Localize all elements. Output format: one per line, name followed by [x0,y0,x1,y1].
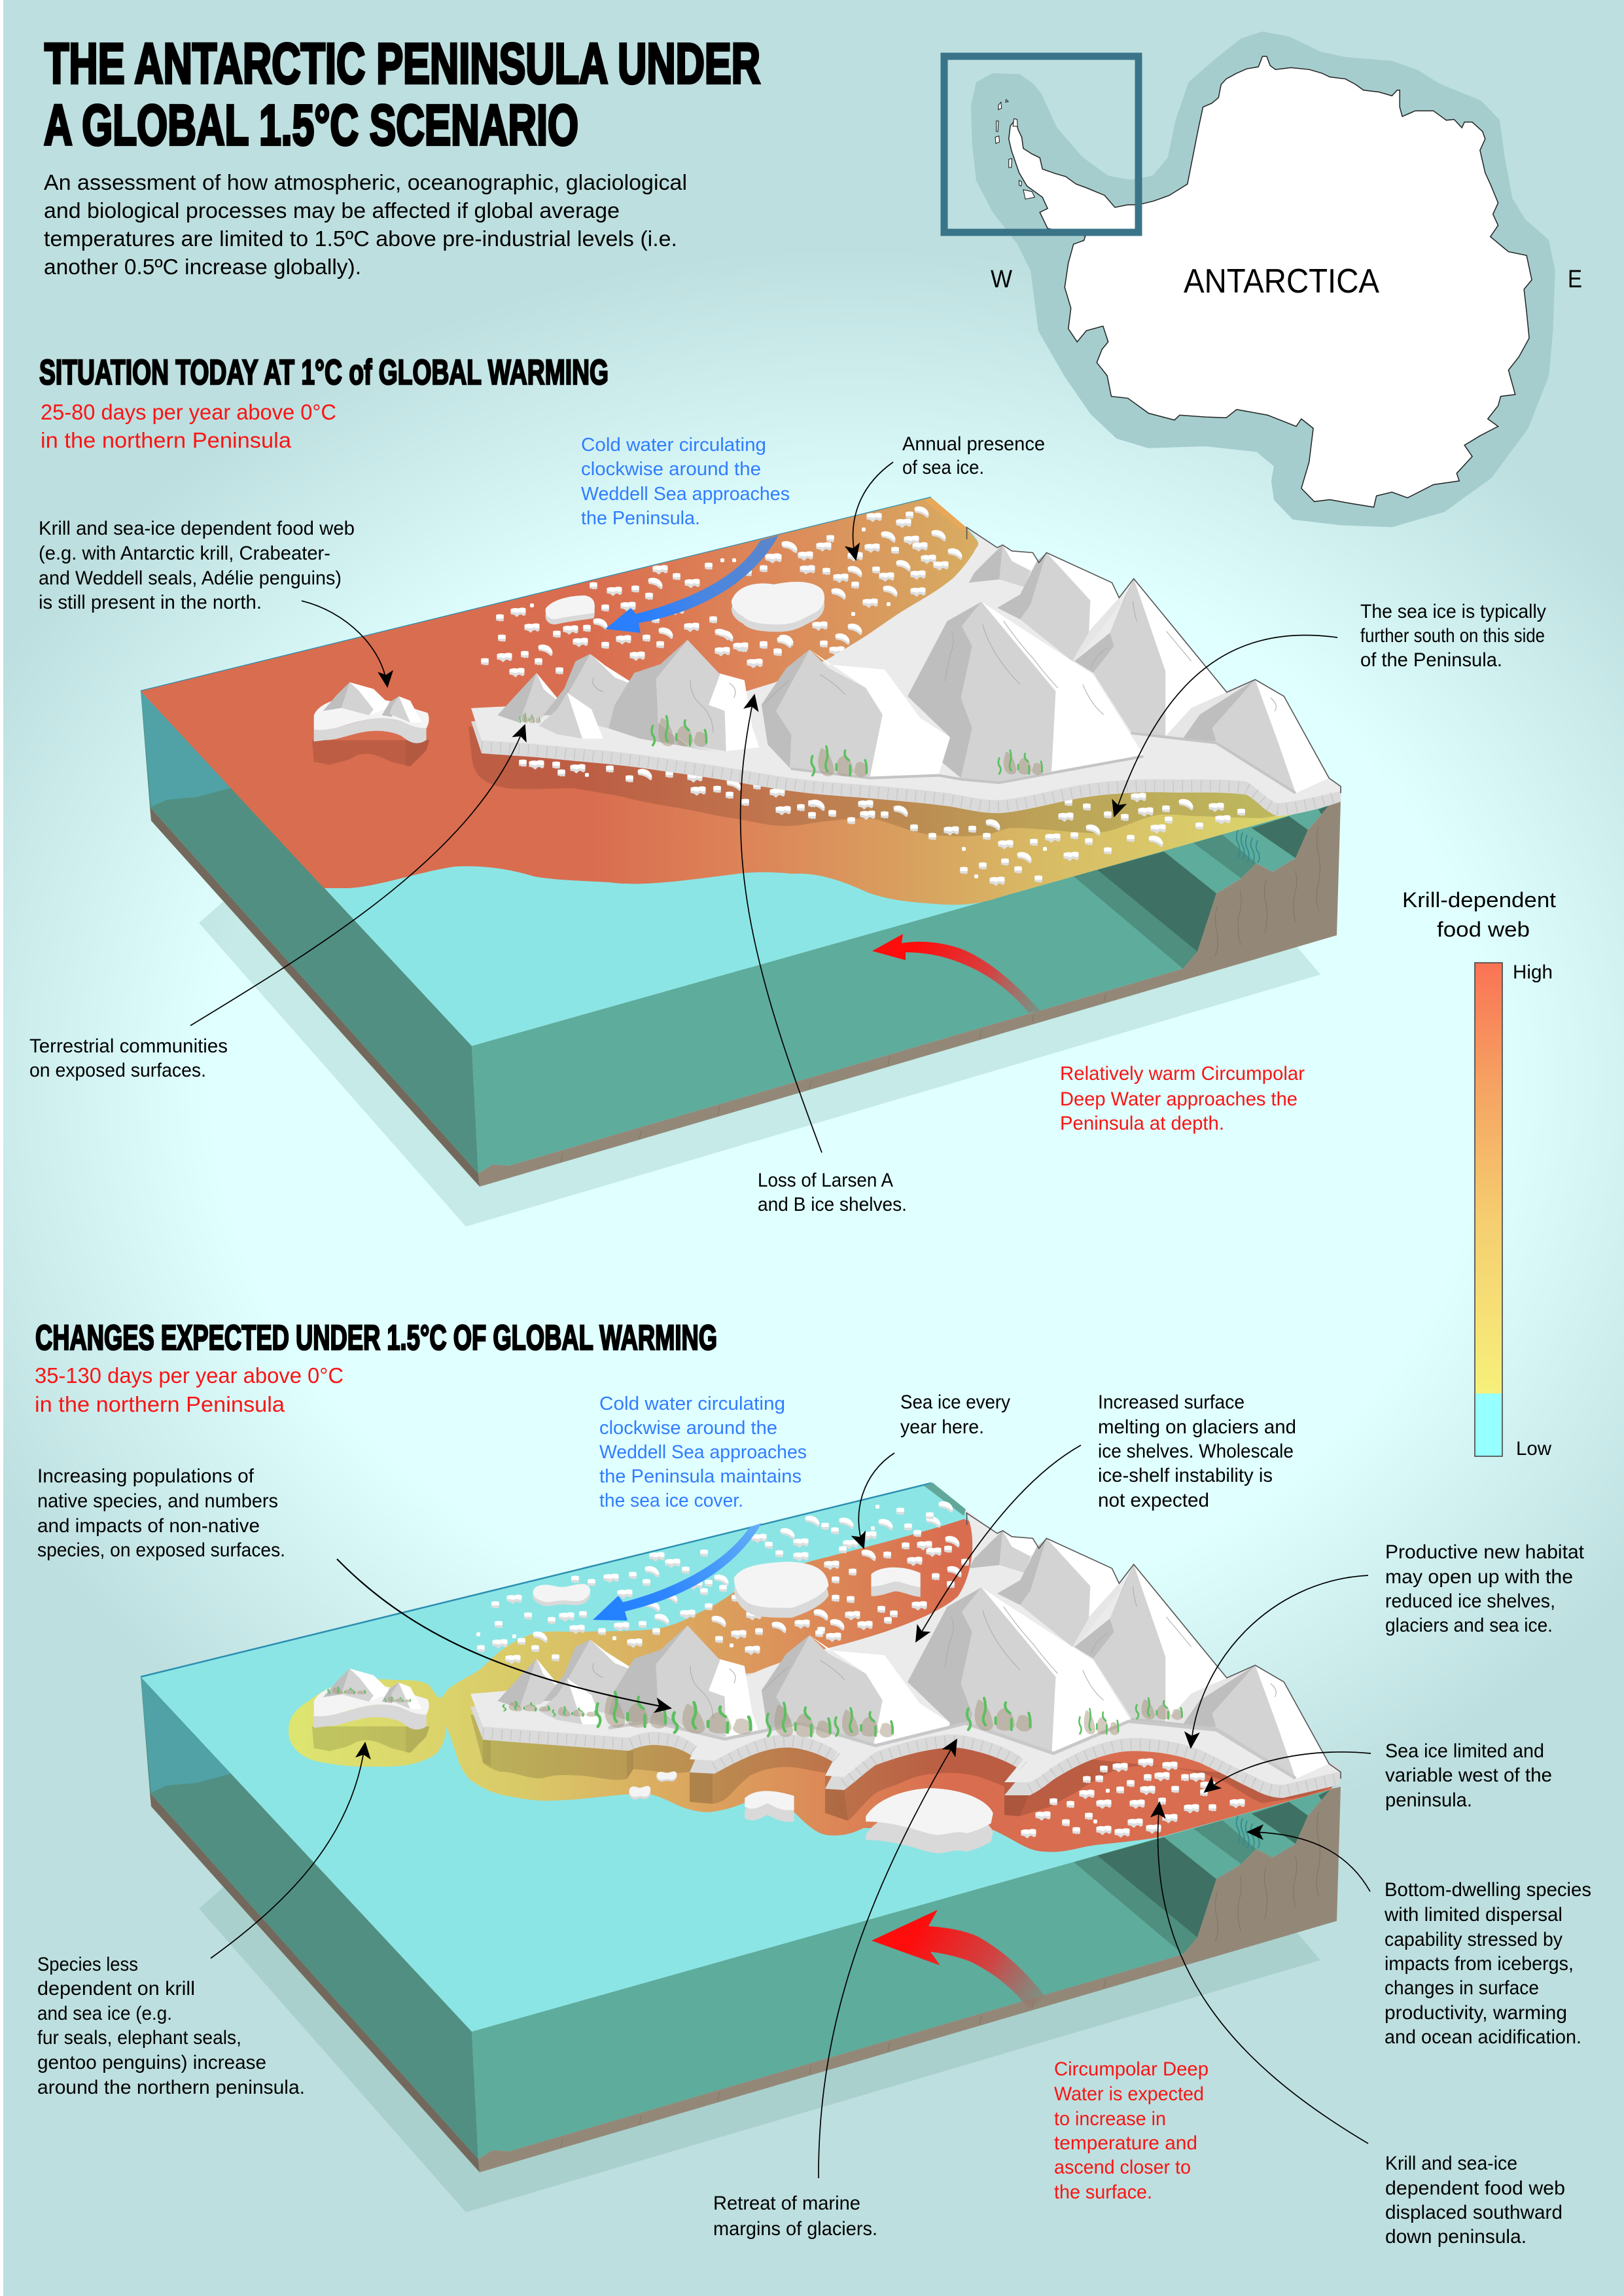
arrow: productive new habitat [1191,1575,1368,1748]
island with mountains [312,682,429,766]
page edge strip [0,0,3,2296]
text: increased surface melting [1098,1391,1296,1511]
text: deep water expected: ascend closer to [1054,2157,1191,2178]
ice shelf and glacier surface [471,528,1341,803]
ocean block with seabed and rock face [141,1677,1341,2212]
text: sea ice east: of the Peninsula. [1360,649,1502,671]
ice face crevasses [482,747,1341,810]
arrow: sea ice limited [1205,1752,1371,1792]
ice shelf and glacier surface [470,1509,1339,1785]
text: days above zero today [41,400,336,452]
text: increasing populations: native species, and numbers [37,1490,278,1512]
map label: east: E [1568,266,1582,293]
text: species less dependent: and sea ice (e.g. [37,2003,172,2024]
title: A GLOBAL 1.5°C SCENARIO [44,94,578,157]
text: Larsen ice shelves [758,1170,907,1215]
back edge line [141,1483,931,1677]
title [44,32,760,157]
text: retreat of glaciers: Retreat of marine [713,2193,860,2214]
map label: west: W [991,266,1012,293]
text: krill food web today: is still present in the north. [39,592,262,613]
text: cold water today: clockwise around the [581,459,761,480]
mountains [497,527,1341,793]
text: terrestrial communities [29,1035,228,1081]
arrow: increased surface melting [916,1445,1081,1641]
text: bottom-dwelling species: productivity, warming [1385,2002,1567,2024]
text: days above zero today: in the northern Peninsula [41,428,292,452]
text: species less dependent: dependent on krill [37,1978,195,2000]
arrow: Larsen ice shelves [741,695,822,1153]
panel: diagram under 1.5C [141,1482,1341,2212]
text: sea ice limited [1385,1740,1552,1811]
legend title [1402,888,1556,941]
ice shelf front face [471,707,1341,816]
text: Larsen ice shelves: and B ice shelves. [758,1194,907,1215]
text: terrestrial communities: on exposed surfaces. [29,1060,206,1081]
text: cold water today: the Peninsula. [581,508,700,529]
arrow: terrestrial communities [190,725,525,1026]
text: productive new habitat: reduced ice shelves, [1385,1590,1555,1612]
panel: locator map of Antarctica [944,33,1582,526]
arrow: circumpolar deep water rising [872,1910,1045,2009]
ice shelf front face [470,1669,1339,1798]
text: sea ice east: further south on this side [1360,625,1545,647]
ice face crevasses [483,1733,1339,1791]
text: terrestrial communities: Terrestrial communities [29,1035,228,1057]
text: deep water expected: Circumpolar Deep [1054,2058,1209,2080]
text: bottom-dwelling species: and ocean acidification. [1385,2026,1581,2048]
arrow: cold Weddell Sea water [605,535,779,633]
map label: Antarctica: ANTARCTICA [1184,262,1379,300]
text: krill food web today [39,518,355,613]
sea ice floes [481,507,1245,886]
arrow: sea ice east [1114,635,1337,816]
text: sea ice east [1360,601,1546,671]
text: bottom-dwelling species: impacts from icebergs, [1385,1953,1574,1975]
text: increased surface melting: Increased surface [1098,1391,1244,1413]
title: THE ANTARCTIC PENINSULA UNDER [44,32,760,96]
text: sea ice limited: peninsula. [1385,1789,1472,1811]
map: sea ice halo and continent [972,33,1553,526]
text: annual sea ice [902,433,1045,478]
legend label high: High [1513,961,1553,983]
text: increasing populations: species, on exposed surfaces. [37,1539,285,1561]
intro text block: another 0.5ºC increase globally). [44,255,361,279]
arrow: increasing populations [337,1559,671,1708]
krill food web gradient on sea surface [141,497,1331,905]
shadow below ice shelf [468,726,1335,836]
text: sea ice limited: Sea ice limited and [1385,1740,1544,1762]
mountain base line [609,1721,1296,1778]
sea surface [141,1483,1331,2032]
intro text block [44,170,687,279]
text: cold water under 1.5C: the Peninsula maintains [599,1466,802,1487]
text: deep water expected: temperature and [1054,2132,1197,2154]
text: sea ice every year: Sea ice every [900,1391,1010,1413]
vegetation on exposed surfaces [520,713,1043,777]
icebergs in front of shelf [629,1772,993,1854]
large ice floes [546,582,824,632]
back corner strip [924,497,966,533]
ocean block with seabed and rock face [141,691,1341,1227]
intro text block: and biological processes may be affected if global average [44,198,620,223]
text: increasing populations: Increasing populations of [37,1465,255,1487]
text: productive new habitat [1385,1541,1585,1636]
text: annual sea ice: Annual presence [902,433,1045,455]
arrow: bottom-dwelling species [1248,1832,1370,1892]
text: retreat of glaciers [713,2193,877,2240]
shadow below retreating ice shelf [470,1715,1339,1821]
text: displaced krill food web: displaced southward [1385,2202,1562,2223]
heading: situation today: SITUATION TODAY AT 1°C of GLOBAL WARMING [39,353,609,392]
text: sea ice every year: year here. [900,1416,984,1438]
text: displaced krill food web: dependent food web [1385,2178,1565,2199]
island with mountains and new vegetation [312,1668,429,1753]
text: warm deep water today [1060,1063,1305,1134]
text: displaced krill food web: Krill and sea-ice [1385,2153,1517,2174]
text: productive new habitat: Productive new habitat [1385,1541,1585,1563]
mountains [497,1513,1341,1779]
text: species less dependent: Species less [37,1954,138,1975]
text: days above zero under 1.5C: 35-130 days per year above 0°C [35,1363,344,1388]
arrow: sea ice every year [858,1453,894,1548]
text: bottom-dwelling species: with limited dispersal [1384,1904,1562,1926]
text: species less dependent [37,1954,305,2098]
text: krill food web today: Krill and sea-ice dependent food web [39,518,355,539]
legend label low: Low [1516,1438,1551,1460]
text: cold water under 1.5C [599,1393,807,1511]
vegetation spreading on exposed surfaces [503,1693,1183,1738]
text: bottom-dwelling species: Bottom-dwelling species [1385,1879,1591,1901]
text: bottom-dwelling species: changes in surface [1385,1977,1539,1999]
darker ice cliff base strips [483,1740,1030,1821]
panel: diagram today [141,497,1341,1227]
back corner strip [924,1482,966,1516]
text: krill food web today: (e.g. with Antarctic krill, Crabeater- [39,543,330,564]
text: increased surface melting: ice shelves. Wholescale [1098,1441,1294,1462]
legend: krill-dependent food web [1402,888,1556,1460]
arrow: warm circumpolar deep water [872,934,1040,1013]
intro text block: An assessment of how atmospheric, oceanographic, glaciological [44,170,687,194]
sea ice floes [476,1501,1244,1839]
arrow: cold Weddell Sea water maintains ice [593,1523,762,1621]
arrow: species less dependent [211,1743,365,1958]
intro text block: temperatures are limited to 1.5ºC above pre-industrial levels (i.e. [44,226,677,251]
text: bottom-dwelling species: capability stressed by [1385,1929,1562,1950]
text: increasing populations: and impacts of non-native [37,1515,260,1537]
text: deep water expected: the surface. [1054,2181,1152,2203]
text: increased surface melting: melting on glaciers and [1098,1416,1296,1438]
legend title: food web [1437,918,1530,941]
text: sea ice east: The sea ice is typically [1360,601,1546,622]
text: productive new habitat: glaciers and sea ice. [1385,1615,1553,1636]
text: days above zero today: 25-80 days per year above 0°C [41,400,336,424]
text: warm deep water today: Relatively warm Circumpolar [1060,1063,1305,1085]
text: krill food web today: and Weddell seals, Adélie penguins) [39,567,342,589]
text: cold water under 1.5C: Cold water circulating [599,1393,785,1414]
text: deep water expected: Water is expected [1054,2083,1204,2105]
text: cold water today: Weddell Sea approaches [581,484,790,505]
text: cold water under 1.5C: clockwise around the [599,1418,777,1439]
text: sea ice limited: variable west of the [1385,1765,1552,1786]
text: bottom-dwelling species [1384,1879,1591,2048]
text: species less dependent: around the northern peninsula. [37,2077,305,2098]
large ice floes [533,1562,921,1618]
text: deep water expected: to increase in [1054,2108,1166,2130]
text: increased surface melting: ice-shelf instability is [1098,1465,1273,1486]
map: inset box around peninsula [944,56,1139,232]
text: cold water under 1.5C: the sea ice cover. [599,1490,743,1511]
text: increasing populations [37,1465,285,1561]
text: species less dependent: fur seals, elephant seals, [37,2027,241,2049]
sea surface [141,497,1331,1046]
arrow: displaced krill food web [1158,1803,1368,2144]
arrow: krill to island [302,601,387,687]
text: species less dependent: gentoo penguins) increase [37,2052,266,2073]
krill food web gradient displaced south [289,1519,1339,1852]
text: displaced krill food web [1385,2153,1565,2248]
text: cold water today [581,435,790,529]
text: cold water today: Cold water circulating [581,435,766,456]
text: annual sea ice: of sea ice. [902,457,984,478]
text: days above zero under 1.5C: in the northern Peninsula [35,1392,285,1416]
text: warm deep water today: Peninsula at depth. [1060,1113,1224,1134]
legend title: Krill-dependent [1402,888,1556,912]
text: displaced krill food web: down peninsula. [1385,2226,1527,2248]
text: retreat of glaciers: margins of glaciers. [713,2218,877,2240]
text: days above zero under 1.5C [35,1363,344,1416]
arrow: retreat of glaciers [819,1740,957,2178]
text: increased surface melting: not expected [1098,1490,1209,1511]
text: cold water under 1.5C: Weddell Sea approaches [599,1442,807,1463]
heading: changes expected: CHANGES EXPECTED UNDER 1.5°C OF GLOBAL WARMING [35,1318,717,1357]
text: sea ice every year [900,1391,1010,1438]
text: warm deep water today: Deep Water approaches the [1060,1088,1297,1110]
text: Larsen ice shelves: Loss of Larsen A [758,1170,893,1191]
legend colour bar [1475,963,1502,1456]
text: productive new habitat: may open up with the [1385,1566,1573,1588]
arrow: annual sea ice [853,462,893,560]
text: deep water expected [1054,2058,1209,2203]
back edge line [141,497,931,691]
